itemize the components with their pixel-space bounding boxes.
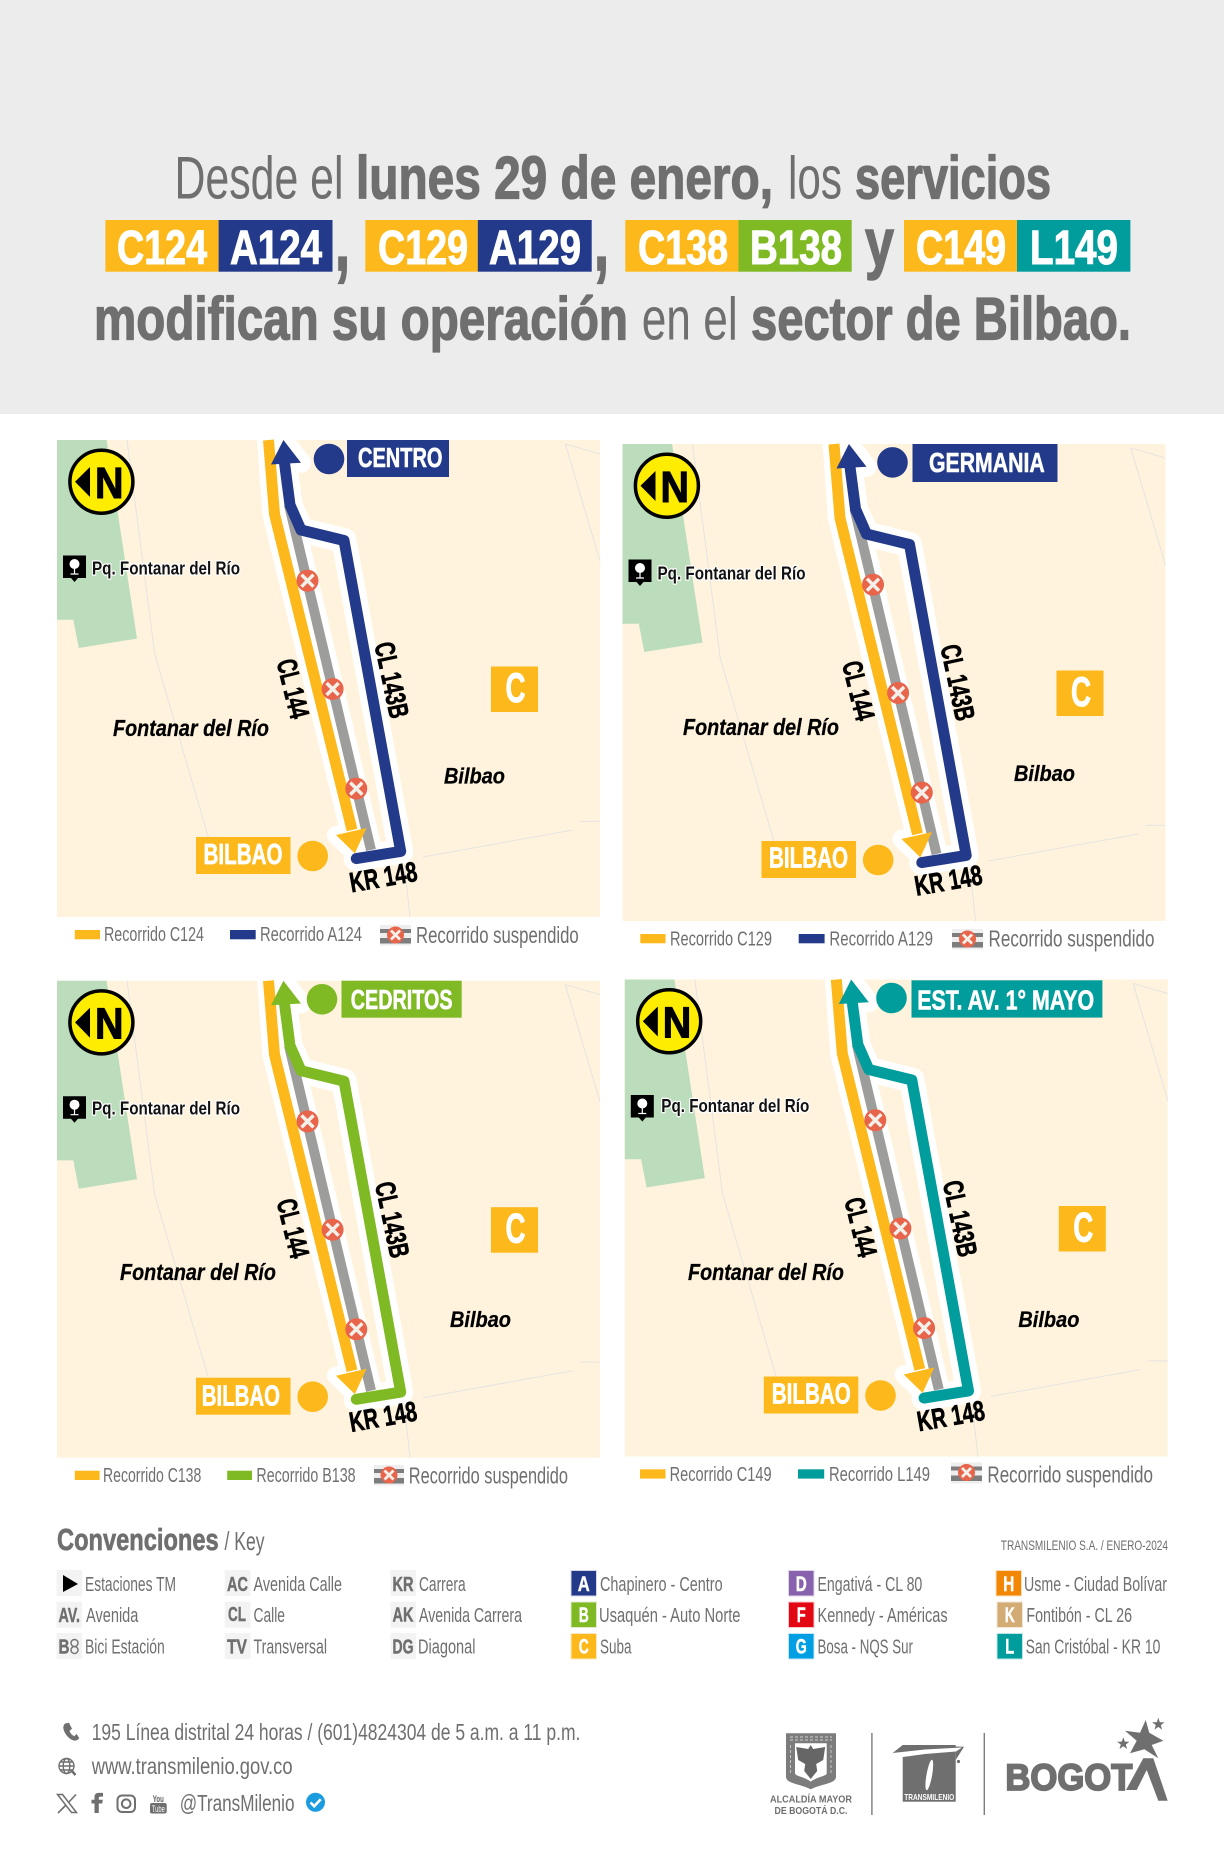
destination label Germania: GERMANIA (929, 447, 1045, 478)
icon: globe (59, 1758, 76, 1775)
destination label Centro: CENTRO (358, 442, 442, 473)
icon: YouTube: You (153, 1794, 164, 1804)
title line 2: service badges: C138 (638, 222, 728, 275)
zone badge C: C (506, 664, 526, 711)
key column 1: Bici Estación (85, 1637, 165, 1659)
origin label Bilbao: BILBAO (204, 839, 282, 871)
panel: map Germania (C129 / A129) (622, 436, 1166, 952)
logo: Alcaldía Mayor de Bogotá: ALCALDÍA MAYOR (770, 1794, 852, 1806)
key column 2: Transversal (254, 1637, 327, 1659)
title line 2: service badges: C149 (916, 222, 1006, 275)
title line 1 (174, 144, 1051, 211)
legend: Recorrido C149 (670, 1464, 772, 1486)
icon: north arrow: N (663, 998, 691, 1048)
icon: north arrow (638, 990, 701, 1053)
park label (631, 1095, 809, 1122)
logo: TransMilenio (893, 1745, 964, 1802)
icon: Instagram (118, 1796, 135, 1812)
key column 4: troncales A, B, C: B (579, 1604, 589, 1627)
street label CL 143B: CL 143B (935, 642, 981, 723)
legend: Recorrido suspendido (416, 922, 579, 948)
key column 5: troncales D, F, G: Bosa - NQS Sur (818, 1637, 913, 1659)
street label KR 148: KR 148 (347, 856, 420, 898)
zone badge C: C (1071, 668, 1091, 715)
legend: Recorrido L149 (829, 1464, 930, 1486)
zone badge C (491, 1205, 538, 1253)
icon: north arrow (70, 991, 133, 1054)
destination label Cedritos (307, 981, 462, 1018)
logo: TransMilenio: TRANSMILENIO (904, 1792, 955, 1802)
destination label Est. Av. 1° Mayo: EST. AV. 1° MAYO (917, 984, 1094, 1015)
legend (640, 1462, 1153, 1488)
title line 2: service badges: L149 (1030, 222, 1118, 275)
logo: Alcaldía Mayor de Bogotá: DE BOGOTÁ D.C. (774, 1805, 848, 1817)
park label: Pq. Fontanar del Río (661, 1096, 809, 1116)
zone badge C: C (506, 1205, 526, 1252)
legend (75, 922, 579, 948)
logo: Bogotá (1005, 1718, 1168, 1801)
park label (628, 560, 806, 586)
legend: Recorrido C124 (104, 924, 204, 946)
icon: north arrow (70, 450, 133, 513)
key column 5: troncales D, F, G (788, 1570, 948, 1659)
title line 2: service badges: , (335, 194, 350, 289)
contact block (58, 1719, 580, 1816)
title line 1: lunes 29 de enero, (356, 144, 773, 211)
header band (0, 0, 1224, 414)
key column 1: AV. (58, 1605, 80, 1627)
social handle text: @TransMilenio (180, 1790, 294, 1816)
icon: X (58, 1794, 76, 1813)
street label CL 144: CL 144 (838, 1194, 883, 1260)
neighbourhood label Fontanar del Río: Fontanar del Río (113, 715, 269, 741)
suspended markers (296, 570, 367, 800)
neighbourhood label Bilbao: Bilbao (1018, 1307, 1079, 1332)
neighbourhood label Bilbao: Bilbao (450, 1307, 511, 1332)
key column 1: B (58, 1637, 70, 1659)
icon: north arrow: N (95, 1000, 124, 1049)
divider (984, 1733, 985, 1815)
route lines (834, 436, 966, 863)
key column 5: troncales D, F, G: D (796, 1573, 807, 1596)
title line 1: servicios (855, 144, 1051, 211)
zone badge C (1059, 1204, 1106, 1252)
legend: Recorrido C129 (670, 928, 772, 950)
key column 5: troncales D, F, G: G (796, 1636, 807, 1659)
route lines (836, 972, 968, 1398)
zone badge C: C (1073, 1204, 1093, 1250)
title line 2: service badges (105, 194, 1130, 289)
icon: verified badge (306, 1793, 325, 1812)
key section (56, 1522, 1168, 1659)
street label CL 143B: CL 143B (369, 1179, 415, 1261)
key column 1: Avenida (86, 1605, 139, 1627)
icon: YouTube (150, 1794, 167, 1814)
legend: Recorrido A129 (829, 928, 933, 950)
key column 6: troncales H, K, L: San Cristóbal - KR 10 (1026, 1637, 1160, 1659)
key column 4: troncales A, B, C: Usaquén - Auto Norte (599, 1605, 740, 1627)
title line 3 (94, 285, 1131, 352)
key column 6: troncales H, K, L: Usme - Ciudad Bolívar (1024, 1574, 1167, 1596)
park label (63, 1096, 240, 1123)
suspended markers (862, 574, 933, 804)
legend: Recorrido suspendido (988, 926, 1154, 952)
zone badge C (491, 664, 538, 712)
panel: map Est. Av. 1° Mayo (C149 / L149) (625, 972, 1168, 1488)
map background (625, 980, 1168, 1456)
logo: Alcaldía Mayor de Bogotá (770, 1733, 852, 1817)
phone text: 195 Línea distrital 24 horas / (601)4824304 de 5 a.m. a 11 p.m. (92, 1719, 580, 1745)
key column 4: troncales A, B, C: Suba (600, 1637, 632, 1659)
zone badge C (1056, 668, 1104, 716)
destination label Est. Av. 1° Mayo (876, 980, 1102, 1018)
key column 5: troncales D, F, G: F (797, 1604, 806, 1627)
key column 6: troncales H, K, L: L (1005, 1636, 1014, 1659)
legend (640, 926, 1154, 952)
key column 6: troncales H, K, L: Fontibón - CL 26 (1026, 1605, 1132, 1627)
icon: YouTube: Tube (152, 1804, 165, 1814)
website text: www.transmilenio.gov.co (91, 1753, 293, 1779)
park label: Pq. Fontanar del Río (658, 564, 806, 584)
park label (63, 556, 240, 582)
origin label Bilbao: BILBAO (772, 1378, 851, 1410)
neighbourhood label Bilbao: Bilbao (1014, 761, 1075, 786)
destination label Germania (877, 444, 1058, 482)
icon: north arrow (635, 454, 698, 517)
street label CL 143B: CL 143B (937, 1178, 983, 1259)
panel: map Centro (C124 / A124) (57, 432, 600, 948)
street label CL 144: CL 144 (836, 658, 881, 724)
icon: north arrow: N (660, 463, 689, 512)
neighbourhood label Fontanar del Río: Fontanar del Río (120, 1259, 276, 1285)
origin label Bilbao: BILBAO (202, 1381, 280, 1413)
key column 3: DG (392, 1637, 414, 1659)
title line 2: service badges: , (594, 194, 609, 289)
title line 2: service badges: C124 (117, 222, 207, 275)
title line 3: sector de Bilbao. (751, 285, 1131, 352)
park label: Pq. Fontanar del Río (92, 1098, 240, 1118)
park label: Pq. Fontanar del Río (92, 558, 240, 578)
key column 4: troncales A, B, C: A (578, 1573, 590, 1596)
key column 5: troncales D, F, G: Engativá - CL 80 (818, 1574, 922, 1596)
legend: Recorrido suspendido (409, 1462, 568, 1488)
key column 6: troncales H, K, L: K (1005, 1604, 1015, 1627)
legend: Recorrido C138 (103, 1465, 201, 1487)
key column 1 (56, 1570, 176, 1659)
title line 1: los (788, 144, 842, 211)
map background (57, 440, 600, 917)
legend: Recorrido suspendido (987, 1462, 1153, 1488)
street label KR 148: KR 148 (347, 1396, 419, 1438)
icon: north arrow: N (95, 459, 124, 508)
key column 5: troncales D, F, G: Kennedy - Américas (818, 1605, 948, 1627)
key column 3 (390, 1570, 523, 1659)
key column 3: KR (392, 1574, 414, 1596)
panel: map Cedritos (C138 / B138) (57, 973, 600, 1488)
key column 1: Estaciones TM (85, 1574, 176, 1596)
logo: Bogotá: BOGOT (1005, 1757, 1133, 1798)
legend: Recorrido B138 (256, 1465, 356, 1487)
title line 2: service badges: C129 (378, 222, 468, 275)
key column 2 (225, 1570, 342, 1659)
destination label Centro (314, 440, 449, 477)
neighbourhood label Fontanar del Río: Fontanar del Río (688, 1259, 844, 1285)
neighbourhood label Fontanar del Río: Fontanar del Río (683, 714, 839, 740)
divider (871, 1733, 873, 1815)
title line 3: modifican su operación (94, 285, 628, 352)
street label KR 148: KR 148 (912, 859, 985, 902)
key column 3: AK (392, 1604, 414, 1626)
key column 2: Avenida Calle (254, 1574, 342, 1596)
icon: Facebook (92, 1793, 103, 1813)
key column 2: AC (227, 1574, 248, 1596)
suspended markers (296, 1110, 367, 1340)
destination label Cedritos: CEDRITOS (351, 984, 452, 1015)
key column 4: troncales A, B, C: C (579, 1636, 589, 1659)
heading: Convenciones / Key: / Key (224, 1526, 264, 1556)
logos (770, 1718, 1168, 1817)
street label CL 144: CL 144 (271, 656, 315, 722)
legend: Recorrido A124 (260, 924, 362, 946)
street label CL 143B: CL 143B (369, 639, 415, 721)
title line 3: en el (642, 285, 738, 352)
map background (57, 981, 600, 1458)
title line 2: service badges: A129 (489, 222, 581, 275)
key column 6: troncales H, K, L (996, 1570, 1167, 1659)
key column 3: Diagonal (418, 1637, 476, 1659)
icon: phone (63, 1723, 79, 1741)
key column 4: troncales A, B, C (571, 1570, 740, 1659)
key column 4: troncales A, B, C: Chapinero - Centro (600, 1574, 723, 1596)
key column 3: Avenida Carrera (419, 1605, 523, 1627)
legend (75, 1462, 568, 1488)
route lines (268, 973, 401, 1399)
key column 2: Calle (254, 1605, 285, 1627)
route lines (268, 432, 401, 859)
street label CL 144: CL 144 (271, 1196, 315, 1262)
neighbourhood label Bilbao: Bilbao (444, 763, 505, 788)
map background (622, 444, 1166, 921)
suspended markers (864, 1109, 935, 1339)
heading: Convenciones / Key: Convenciones (57, 1522, 219, 1557)
origin label Bilbao: BILBAO (769, 842, 848, 874)
street label KR 148: KR 148 (915, 1395, 987, 1437)
key column 6: troncales H, K, L: H (1003, 1573, 1014, 1596)
key column 2: CL (228, 1604, 246, 1626)
key column 2: TV (227, 1637, 248, 1659)
title line 1: Desde el (174, 144, 344, 211)
key column 3: Carrera (419, 1574, 466, 1596)
title line 2: service badges: B138 (750, 222, 842, 275)
title line 2: service badges: y (865, 205, 894, 281)
title line 2: service badges: A124 (230, 222, 322, 275)
